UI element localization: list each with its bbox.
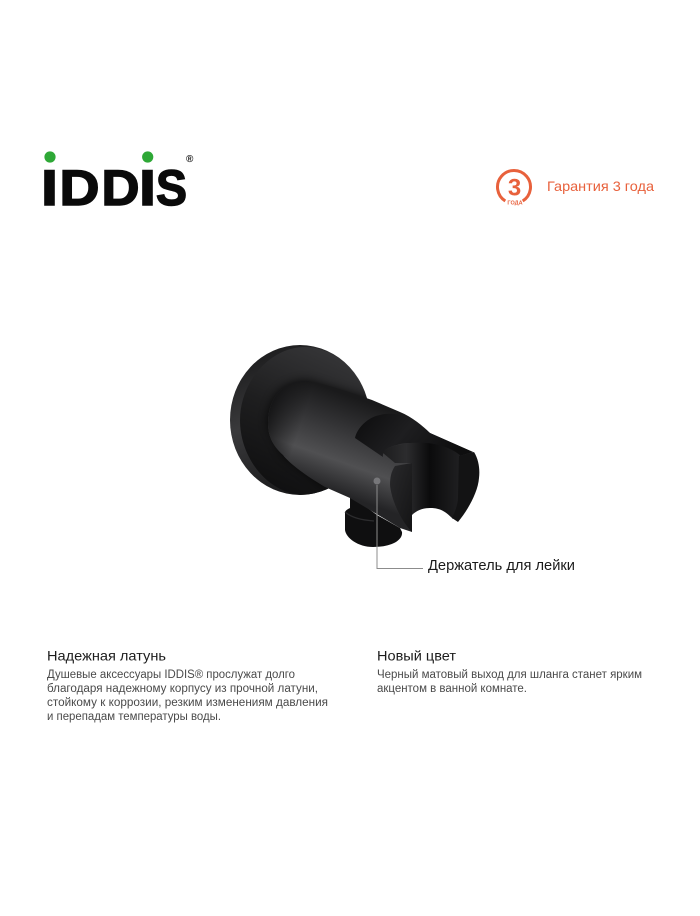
text block: new colour xyxy=(377,648,642,695)
callout: holder label xyxy=(374,478,575,574)
logo wordmark: I xyxy=(139,160,156,216)
body shadow on flange xyxy=(268,381,372,487)
logo green dot left xyxy=(44,151,56,163)
warranty icon caption: ГОДА xyxy=(507,200,523,206)
warranty icon number: 3 xyxy=(508,174,521,202)
heading: brass: Надежная латунь xyxy=(47,648,166,664)
callout dot xyxy=(374,478,380,484)
warranty icon ring xyxy=(498,170,530,201)
body left fade xyxy=(268,381,320,470)
text block: brass xyxy=(47,648,328,723)
body copy: brass: стойкому к коррозии, резким изменениям давления xyxy=(47,697,328,709)
body copy: new colour: Черный матовый выход для шланга станет ярким xyxy=(377,669,642,681)
logo wordmark: I xyxy=(41,160,58,216)
holder right jaw xyxy=(452,452,479,522)
holder left jaw xyxy=(390,463,412,532)
page canvas xyxy=(44,151,654,722)
body copy: brass: благодаря надежному корпусу из прочной латуни, xyxy=(47,683,318,695)
flange face xyxy=(240,347,370,495)
warranty text: Гарантия 3 года xyxy=(547,178,654,194)
holder body xyxy=(268,381,473,532)
body copy: brass: Душевые аксессуары IDDIS® прослужат долго xyxy=(47,669,295,681)
body copy: new colour xyxy=(377,669,642,695)
wall flange rim xyxy=(230,345,370,495)
hose connector nut xyxy=(345,495,402,547)
logo: IDDIS xyxy=(41,151,194,216)
body copy: brass xyxy=(47,669,328,723)
registered mark: ® xyxy=(186,154,194,165)
holder top recess xyxy=(355,414,473,457)
logo wordmark: S xyxy=(156,160,187,216)
callout text: Держатель для лейки xyxy=(428,558,575,574)
warranty badge xyxy=(498,170,654,206)
heading: new colour: Новый цвет xyxy=(377,648,457,664)
logo wordmark: D xyxy=(60,160,100,216)
logo wordmark xyxy=(41,160,187,216)
logo wordmark: D xyxy=(102,160,140,216)
body copy: brass: и перепадам температуры воды. xyxy=(47,711,221,723)
logo green dot right xyxy=(142,151,153,163)
product: black shower holder xyxy=(230,345,479,547)
body copy: new colour: акцентом в ванной комнате. xyxy=(377,683,527,695)
callout leader line xyxy=(377,485,423,568)
holder inner cup xyxy=(383,443,461,519)
